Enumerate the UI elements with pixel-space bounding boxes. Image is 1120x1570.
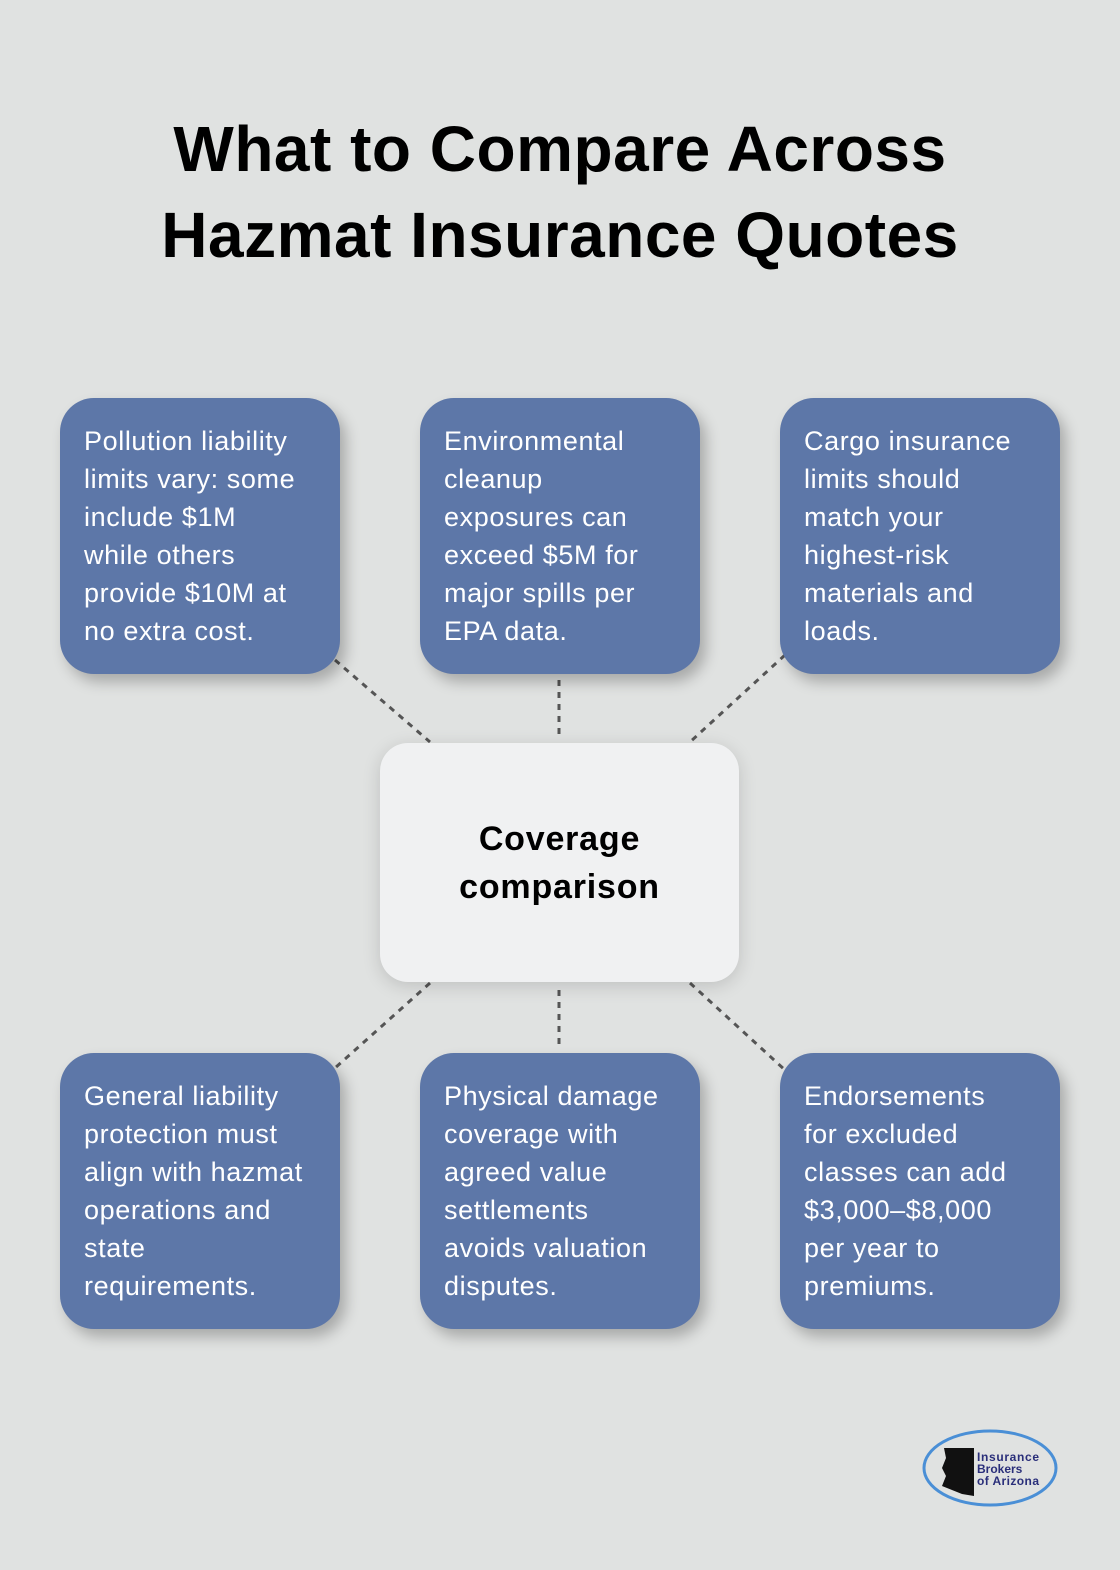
- panel: general liability: requirements.: [84, 1271, 257, 1301]
- logo: Insurance: [977, 1450, 1039, 1464]
- panel: pollution liability: provide $10M at: [84, 578, 287, 608]
- panel: physical damage: avoids valuation: [444, 1233, 647, 1263]
- panel: endorsements: [780, 1053, 1060, 1329]
- panel: environmental cleanup: [420, 398, 700, 674]
- panel: endorsements: for excluded: [804, 1119, 958, 1149]
- panel: pollution liability: while others: [84, 540, 235, 570]
- title: [161, 113, 959, 271]
- panel: endorsements: premiums.: [804, 1271, 935, 1301]
- panel: cargo insurance: [780, 398, 1060, 674]
- panel: physical damage: disputes.: [444, 1271, 557, 1301]
- panel: endorsements: Endorsements: [804, 1081, 985, 1111]
- panel: endorsements: per year to: [804, 1233, 940, 1263]
- panel: general liability: align with hazmat: [84, 1157, 303, 1187]
- panel: environmental cleanup: cleanup: [444, 464, 543, 494]
- panel: general liability: General liability: [84, 1081, 279, 1111]
- panel: environmental cleanup: Environmental: [444, 426, 624, 456]
- panel: cargo insurance: Cargo insurance: [804, 426, 1011, 456]
- panel: cargo insurance: loads.: [804, 616, 880, 646]
- panel: physical damage: settlements: [444, 1195, 589, 1225]
- center node: comparison: [459, 868, 660, 906]
- title: What to Compare Across: [173, 113, 947, 185]
- panel: general liability: state: [84, 1233, 146, 1263]
- logo: of Arizona: [977, 1474, 1039, 1488]
- center node: Coverage: [479, 820, 640, 858]
- panel: environmental cleanup: major spills per: [444, 578, 635, 608]
- panel: physical damage: [420, 1053, 700, 1329]
- panel: general liability: operations and: [84, 1195, 271, 1225]
- title: Hazmat Insurance Quotes: [161, 199, 959, 271]
- panel: pollution liability: limits vary: some: [84, 464, 295, 494]
- panel: cargo insurance: highest-risk: [804, 540, 949, 570]
- panel: pollution liability: [60, 398, 340, 674]
- panel: physical damage: coverage with: [444, 1119, 618, 1149]
- panel: cargo insurance: limits should: [804, 464, 960, 494]
- panel: endorsements: classes can add: [804, 1157, 1007, 1187]
- logo: [922, 1430, 1058, 1506]
- panel: general liability: protection must: [84, 1119, 278, 1149]
- panel: physical damage: agreed value: [444, 1157, 607, 1187]
- panel: pollution liability: include $1M: [84, 502, 236, 532]
- center node: [380, 743, 739, 982]
- panel: cargo insurance: match your: [804, 502, 944, 532]
- panel: physical damage: Physical damage: [444, 1081, 659, 1111]
- panel: pollution liability: Pollution liability: [84, 426, 288, 456]
- panel: environmental cleanup: exceed $5M for: [444, 540, 638, 570]
- panel: cargo insurance: materials and: [804, 578, 974, 608]
- logo: Brokers: [977, 1462, 1023, 1476]
- panel: general liability: [60, 1053, 340, 1329]
- panel: environmental cleanup: exposures can: [444, 502, 627, 532]
- panel: pollution liability: no extra cost.: [84, 616, 254, 646]
- panel: environmental cleanup: EPA data.: [444, 616, 568, 646]
- panel: endorsements: $3,000–$8,000: [804, 1195, 992, 1225]
